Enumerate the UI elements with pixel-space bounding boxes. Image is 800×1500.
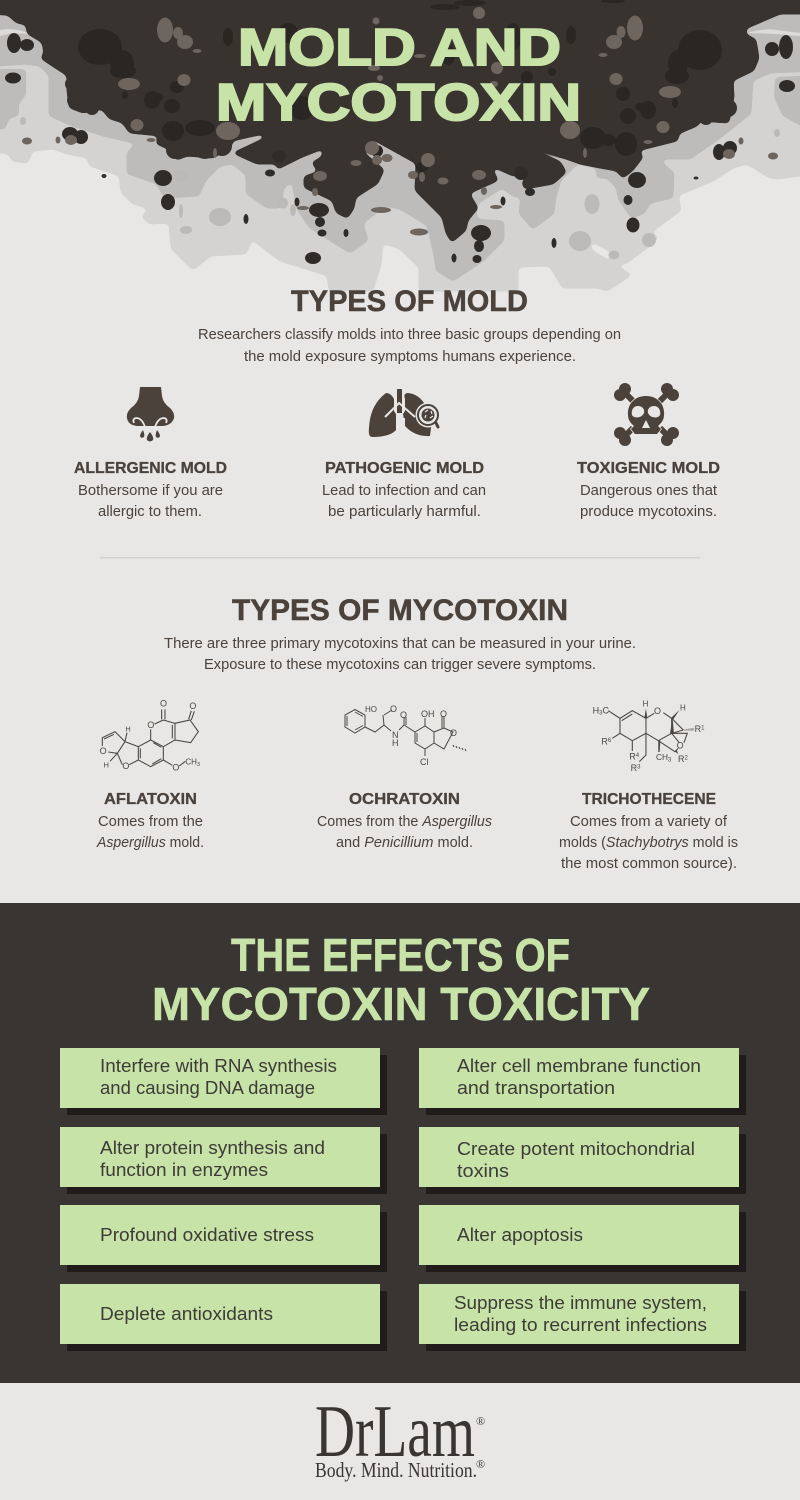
molecule: trichothecene: H <box>593 705 599 715</box>
molecule: aflatoxin: CH <box>185 758 197 767</box>
intro: types of mycotoxin: There are three primary mycotoxins that can be measured in your urine. <box>164 635 636 652</box>
molecule: aflatoxin: O <box>122 761 129 771</box>
intro: types of mold <box>198 326 621 365</box>
molecule: trichothecene: R <box>601 736 608 746</box>
molecule: trichothecene: R <box>629 751 636 761</box>
heading: types of mold: TYPES OF MOLD <box>291 285 528 318</box>
block: trichothecene: TRICHOTHECENE <box>582 791 716 808</box>
block: trichothecene <box>559 791 738 872</box>
molecule: trichothecene: R <box>678 754 684 764</box>
molecule: trichothecene: H <box>643 700 649 709</box>
molecule: ochratoxin <box>345 704 466 767</box>
block: pathogenic mold: PATHOGENIC MOLD <box>325 460 484 477</box>
intro: types of mold: Researchers classify molds into three basic groups depending on <box>198 326 621 343</box>
molecule: trichothecene: CH <box>656 752 668 762</box>
block: allergenic mold: Bothersome if you are <box>78 482 223 499</box>
title: MYCOTOXIN <box>216 73 581 131</box>
block: toxigenic mold: Dangerous ones that <box>580 482 718 499</box>
block: allergenic mold <box>74 460 227 520</box>
logo: DrLam: Body. Mind. Nutrition. <box>315 1458 477 1482</box>
effect boxes left: Alter protein synthesis and <box>100 1137 325 1158</box>
molecule: aflatoxin: O <box>189 701 196 711</box>
brown spots <box>22 7 778 236</box>
effect boxes right: leading to recurrent infections <box>454 1314 707 1335</box>
block: allergenic mold: ALLERGENIC MOLD <box>74 460 227 477</box>
block: toxigenic mold: produce mycotoxins. <box>580 503 717 520</box>
molecule: trichothecene: 6 <box>608 738 612 744</box>
molecule: trichothecene: R <box>695 724 701 734</box>
molecule: trichothecene: O <box>654 706 661 716</box>
block: pathogenic mold <box>322 460 486 520</box>
intro: types of mycotoxin: Exposure to these mycotoxins can trigger severe symptoms. <box>204 656 596 673</box>
effect boxes left: Deplete antioxidants <box>100 1303 273 1324</box>
block: ochratoxin: OCHRATOXIN <box>349 791 460 808</box>
intro: types of mold: the mold exposure symptoms humans experience. <box>244 348 576 365</box>
heading: types of mycotoxin: TYPES OF MYCOTOXIN <box>232 594 568 627</box>
molecule: trichothecene: 1 <box>701 726 705 732</box>
molecule: trichothecene: 3 <box>668 757 672 763</box>
block: pathogenic mold: Lead to infection and can <box>322 482 486 499</box>
icon: skull and crossbones <box>614 383 679 446</box>
molecule: ochratoxin: N <box>392 730 398 740</box>
molecule: aflatoxin: O <box>160 699 167 709</box>
molecule: aflatoxin: H <box>104 760 109 769</box>
effect boxes right: Alter apoptosis <box>457 1224 583 1245</box>
molecule: trichothecene: 2 <box>684 756 688 762</box>
block: pathogenic mold: be particularly harmful. <box>328 503 481 520</box>
title <box>216 18 581 131</box>
molecule: ochratoxin: OH <box>421 709 434 719</box>
panel: effects of mycotoxin toxicity <box>0 903 800 1383</box>
effect boxes left: and causing DNA damage <box>100 1077 315 1098</box>
effect boxes right: Alter cell membrane function <box>457 1055 701 1076</box>
molecule: aflatoxin: O <box>172 763 179 773</box>
block: ochratoxin: and Penicillium mold. <box>336 834 473 851</box>
molecule: trichothecene: 3 <box>637 765 641 771</box>
panel heading: MYCOTOXIN TOXICITY <box>152 978 650 1030</box>
effect boxes left: Interfere with RNA synthesis <box>100 1055 337 1076</box>
icon: nose <box>127 387 174 442</box>
block: trichothecene: Comes from a variety of <box>570 813 728 830</box>
block: trichothecene: the most common source). <box>561 855 737 872</box>
molecule: aflatoxin: O <box>147 720 154 730</box>
molecule: trichothecene: 4 <box>636 753 640 759</box>
block: ochratoxin <box>317 791 492 851</box>
molecule: ochratoxin: O <box>400 710 407 720</box>
block: aflatoxin: Comes from the <box>98 813 203 830</box>
icon: lungs with magnifier <box>369 389 440 437</box>
effect boxes right: and transportation <box>457 1077 615 1098</box>
molecule: aflatoxin <box>100 699 200 773</box>
molecule: ochratoxin: O <box>390 704 397 714</box>
block: allergenic mold: allergic to them. <box>98 503 202 520</box>
effect boxes left: function in enzymes <box>100 1159 268 1180</box>
molecule: ochratoxin: HO <box>365 705 377 714</box>
logo: DrLam: ® <box>476 1457 485 1471</box>
block: trichothecene: molds (Stachybotrys mold is <box>559 834 738 851</box>
title: MOLD AND <box>238 18 561 76</box>
panel heading: THE EFFECTS OF <box>231 929 570 981</box>
block: toxigenic mold: TOXIGENIC MOLD <box>577 460 720 477</box>
effect boxes right <box>419 1048 746 1351</box>
dark spots <box>78 0 722 172</box>
block: aflatoxin <box>96 791 204 851</box>
molecule: trichothecene: O <box>677 741 684 751</box>
panel heading <box>152 929 650 1030</box>
molecule: ochratoxin: H <box>392 738 398 748</box>
effect boxes right: Suppress the immune system, <box>454 1292 707 1313</box>
effect boxes left: Profound oxidative stress <box>100 1224 314 1245</box>
molecule: aflatoxin: 3 <box>197 762 200 768</box>
molecule: trichothecene: H <box>680 704 686 713</box>
block: ochratoxin: Comes from the Aspergillus <box>317 813 492 830</box>
molecule: trichothecene: R <box>631 763 637 773</box>
logo: DrLam: ® <box>476 1414 485 1428</box>
block: aflatoxin: AFLATOXIN <box>104 791 197 808</box>
black spots outside blot <box>5 33 795 264</box>
molecule: ochratoxin: Cl <box>420 757 428 767</box>
molecule: aflatoxin: H <box>125 724 131 733</box>
effect boxes left <box>60 1048 387 1351</box>
effect boxes right: toxins <box>457 1160 509 1181</box>
molecule: trichothecene: C <box>602 705 609 715</box>
molecule: ochratoxin: O <box>450 728 457 738</box>
block: toxigenic mold <box>577 460 720 520</box>
molecule: aflatoxin: O <box>100 746 107 756</box>
header mold splatter <box>0 0 800 290</box>
molecule: ochratoxin: O <box>440 709 447 719</box>
intro: types of mycotoxin <box>164 635 636 673</box>
logo: DrLam: DrLam <box>315 1391 475 1473</box>
block: aflatoxin: Aspergillus mold. <box>96 834 204 851</box>
molecule: trichothecene: 3 <box>599 711 603 717</box>
effect boxes right: Create potent mitochondrial <box>457 1138 695 1159</box>
molecule: trichothecene <box>593 700 705 773</box>
